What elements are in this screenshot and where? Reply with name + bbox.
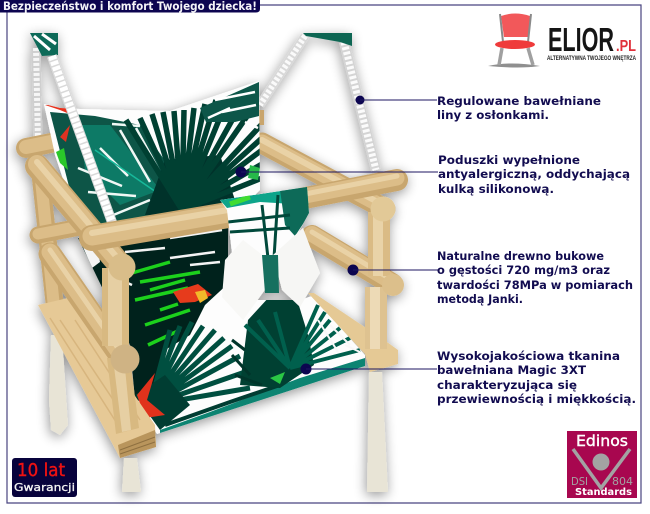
callout: wood: twardości 78MPa w pomiarach — [437, 278, 633, 292]
leader line: pillows — [236, 166, 438, 178]
callout: pillows — [236, 153, 630, 196]
pillow with palm print — [40, 78, 265, 238]
fabric sleeve: right — [303, 33, 352, 46]
right plank — [308, 293, 398, 372]
callout: wood: Naturalne drewno bukowe — [437, 249, 604, 263]
right wooden posts and rails — [312, 196, 404, 349]
left wooden posts and rails — [37, 162, 140, 434]
callout: fabric: bawełniana Magic 3XT — [437, 363, 586, 377]
swing illustration — [26, 33, 404, 492]
callout: pillows: kulką silikonową. — [438, 182, 554, 196]
logo: Elior: .PL — [616, 38, 636, 55]
leader line: ropes — [356, 96, 437, 104]
badge: 10 year warranty: Gwarancji — [14, 482, 75, 494]
badge: Edinos DSI 804 Standards — [567, 431, 637, 498]
seat cushion with palm print — [78, 228, 370, 443]
callout: fabric: Wysokojakościowa tkanina — [437, 349, 620, 363]
badge: Edinos DSI 804 Standards: Standards — [575, 487, 632, 498]
callout: wood: metodą Janki. — [437, 292, 523, 306]
fabric sleeve: left — [30, 33, 58, 56]
badge: 10 year warranty: 10 lat — [17, 461, 65, 481]
callout: wood: o gęstości 720 mg/m3 oraz — [437, 263, 610, 277]
callout: pillows: antyalergiczną, oddychającą — [438, 167, 630, 181]
strap with palm print — [220, 186, 314, 256]
top front rail — [92, 176, 397, 238]
tassel: front — [122, 458, 141, 492]
tassel: right — [367, 372, 388, 492]
badge: Edinos DSI 804 Standards: Edinos — [576, 432, 628, 450]
leader line: fabric — [300, 364, 437, 374]
callout: wood — [348, 249, 633, 306]
callout: ropes: liny z osłonkami. — [437, 108, 549, 122]
callout: ropes — [356, 94, 601, 122]
badge: Edinos DSI 804 Standards: DSI — [571, 475, 588, 488]
rope: front left — [52, 56, 113, 225]
badge: Edinos DSI 804 Standards: 804 — [612, 475, 633, 488]
plank end grain — [118, 430, 156, 458]
logo: Elior — [488, 14, 636, 68]
rope: back right — [260, 36, 305, 105]
callout: fabric — [300, 349, 636, 406]
tassel: back left — [49, 335, 68, 435]
back wooden frame — [26, 110, 385, 307]
callout: pillows: Poduszki wypełnione — [438, 153, 580, 167]
bow — [222, 228, 320, 320]
rope: front right — [344, 42, 376, 170]
left plank — [38, 298, 156, 458]
leader line: wood — [348, 264, 438, 276]
callout: fabric: charakteryzująca się — [437, 378, 577, 392]
rope: back left — [36, 48, 38, 143]
callout: ropes: Regulowane bawełniane — [437, 94, 601, 108]
icon: red chair — [488, 14, 540, 68]
badge: 10 year warranty — [12, 458, 77, 497]
callout: fabric: przewiewnością i miękkością. — [437, 392, 636, 406]
logo: Elior: ELIOR — [548, 21, 614, 58]
